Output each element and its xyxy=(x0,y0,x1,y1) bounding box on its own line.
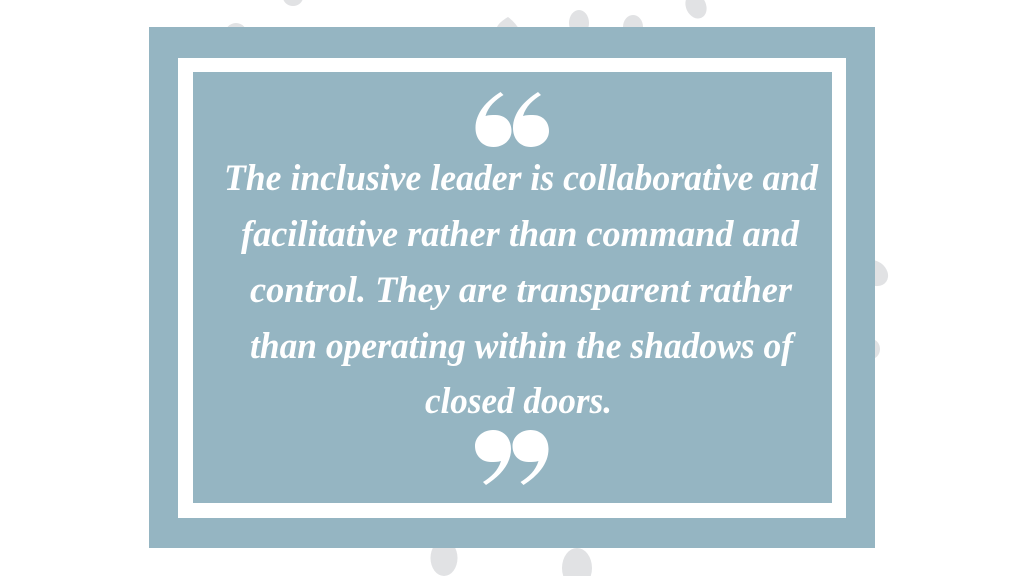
panel: white border xyxy=(178,58,846,518)
icon: opening quotation mark xyxy=(476,92,549,147)
quote text: control. They are transparent rather xyxy=(250,270,793,311)
quote text: than operating within the shadows of xyxy=(250,326,797,367)
icon: closing quotation mark xyxy=(475,430,548,485)
panel: inner blue quote box xyxy=(193,72,832,503)
panel: outer blue frame xyxy=(149,27,875,548)
quote text: The inclusive leader is collaborative and xyxy=(224,158,818,199)
decorative grey blobs xyxy=(225,0,893,576)
quote text: closed doors. xyxy=(425,381,612,422)
quote text: facilitative rather than command and xyxy=(241,214,799,255)
quote text xyxy=(224,158,818,422)
